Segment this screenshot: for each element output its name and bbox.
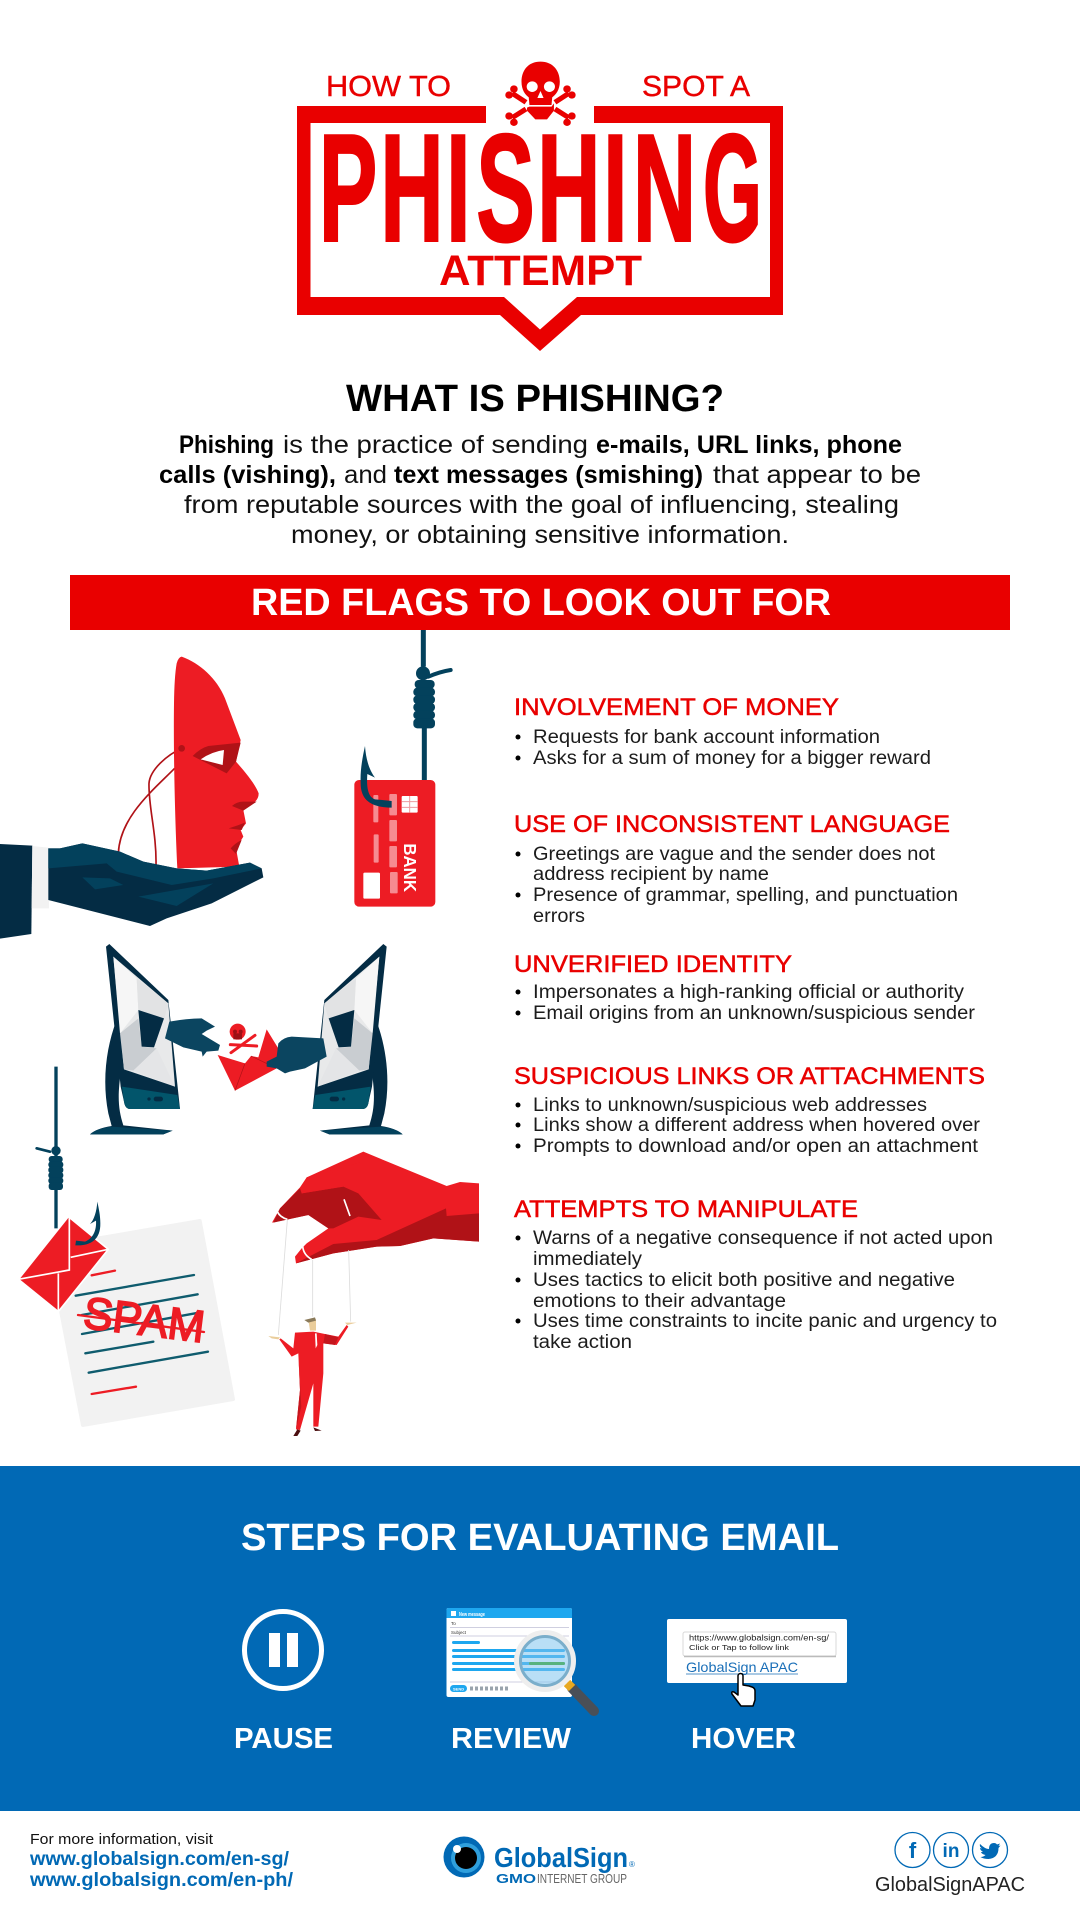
icon: twitter [972,1832,1008,1868]
illustration: mask on hand and bank card on hook [0,630,451,939]
text block: phishing definition: and [344,461,387,489]
text block: phishing definition [159,431,921,549]
icon: linkedin [934,1832,968,1868]
icon: skull and crossbones [505,62,576,126]
text block: phishing definition: from reputable sources with the goal of influencing, stealing [184,491,899,519]
flag list: money [516,727,931,769]
icon: facebook [895,1832,930,1868]
label: review: REVIEW [451,1723,572,1755]
text block: unverified identity [514,951,976,1024]
banner: red flags to look out for [70,575,1010,630]
icon: email review with magnifier: SEND [453,1686,464,1692]
illustration: spam envelope on hook and paper [18,1067,479,1436]
flag heading: identity: UNVERIFIED IDENTITY [514,951,792,978]
mask [118,657,259,868]
right monitor [313,944,403,1134]
heading: phishing: G [703,103,762,274]
panel: steps for evaluating email [0,1466,1080,1811]
footer: more information links: www.globalsign.com/en-sg/ [29,1849,290,1870]
text block: phishing definition: e-mails, URL links, phone [596,431,902,459]
flag list: language: address recipient by name [533,864,769,885]
icon: email review with magnifier: Subject [451,1630,467,1635]
flag list: language: Greetings are vague and the sender does not [533,844,936,865]
text block: phishing definition: is the practice of sending [283,431,588,459]
title frame speech bubble [297,106,783,351]
bank card on hook: BANK [400,843,420,892]
social links: globalsignapac [875,1832,1025,1896]
flag list: manipulate: Uses tactics to elicit both positive and negative [533,1270,955,1291]
footer: more information links: www.globalsign.com/en-ph/ [29,1870,294,1891]
envelope on hook [18,1202,108,1312]
footer: more information links: For more information, visit [30,1832,213,1848]
puppet strings [278,1220,351,1335]
icon: email review with magnifier: New message [459,1612,485,1618]
heading: attempt: ATTEMPT [439,247,642,295]
spam paper [48,1221,233,1425]
illustration: monitors exchanging malicious envelope [90,944,403,1134]
icon: hover over link: Click or Tap to follow link [689,1643,789,1652]
text block: suspicious links or attachments [514,1063,985,1157]
flag heading: links: SUSPICIOUS LINKS OR ATTACHMENTS [514,1063,985,1090]
text block: use of inconsistent language [514,811,958,927]
flag list: language [516,844,958,927]
flag list: language: Presence of grammar, spelling, and punctuation [533,885,958,906]
footer: more information links [29,1832,294,1891]
heading: what is phishing: WHAT IS PHISHING? [346,378,724,420]
heading: steps for evaluating email: STEPS FOR EVALUATING EMAIL [241,1517,839,1559]
text block: phishing definition: text messages (smishing) [394,461,703,489]
text block: phishing definition: Phishing [179,431,274,459]
icon: email review with magnifier: To [451,1621,456,1626]
flag list: identity: Email origins from an unknown/suspicious sender [533,1003,976,1024]
fishing line and knot [37,1067,63,1228]
logo: globalsign: ® [629,1860,635,1869]
text block: phishing definition: calls (vishing), [159,461,336,489]
heading: how to: HOW TO [326,71,451,103]
flag heading: money: INVOLVEMENT OF MONEY [514,694,839,721]
icon: hover over link: GlobalSign APAC [686,1659,798,1675]
icon: pause [244,1612,322,1688]
flag list: manipulate: immediately [533,1249,643,1270]
text block: phishing definition: money, or obtaining sensitive information. [291,521,789,549]
title: how to spot a phishing attempt [297,62,783,351]
social links: globalsignapac: GlobalSignAPAC [875,1874,1025,1896]
icon: hover over link: https://www.globalsign.com/en-sg/ [689,1634,830,1642]
puppeteer hand [272,1152,479,1263]
icon: eye [444,1836,484,1878]
text block: phishing definition: that appear to be [713,461,921,489]
flag list: links: Links show a different address when hovered over [533,1115,981,1136]
flag list: money: Requests for bank account information [533,727,880,748]
flag list: manipulate: Warns of a negative consequence if not acted upon [533,1228,993,1249]
text block: attempts to manipulate [514,1196,997,1353]
icon: linkedin: in [943,1841,959,1862]
bank card on hook [354,630,451,907]
flag list: manipulate [516,1228,997,1353]
icon: hover over link [667,1619,847,1706]
flag list: identity: Impersonates a high-ranking official or authority [533,982,965,1003]
flag heading: manipulate: ATTEMPTS TO MANIPULATE [514,1196,858,1223]
flag list: language: errors [533,906,585,927]
hand [0,843,263,939]
flag list: manipulate: take action [533,1332,632,1353]
label: hover: HOVER [691,1723,796,1755]
flag list: identity [516,982,976,1024]
label: pause: PAUSE [234,1723,333,1755]
logo: globalsign: GlobalSign [494,1842,628,1873]
flag list: links: Links to unknown/suspicious web addresses [533,1095,927,1116]
logo: globalsign: INTERNET GROUP [537,1871,627,1886]
flag list: links [516,1095,981,1157]
flag list: links: Prompts to download and/or open an attachment [533,1136,979,1157]
logo: globalsign: GMO [496,1871,536,1886]
logo: globalsign [444,1836,635,1886]
envelope with skull [218,1024,283,1091]
heading: phishing: PHISHIN [319,103,696,274]
text block: involvement of money [514,694,931,769]
flag heading: language: USE OF INCONSISTENT LANGUAGE [514,811,950,838]
flag list: manipulate: Uses time constraints to incite panic and urgency to [533,1311,997,1332]
flag list: money: Asks for a sum of money for a bigger reward [533,748,931,769]
right hand [267,1037,327,1073]
flag list: manipulate: emotions to their advantage [533,1291,786,1312]
spam paper: SPAM [81,1287,208,1352]
banner: red flags to look out for: RED FLAGS TO LOOK OUT FOR [251,582,831,624]
icon: facebook: f [909,1838,917,1863]
left monitor [90,944,220,1134]
puppet businessman [268,1317,357,1436]
icon: email review with magnifier [446,1608,594,1711]
heading: spot a: SPOT A [642,71,751,103]
